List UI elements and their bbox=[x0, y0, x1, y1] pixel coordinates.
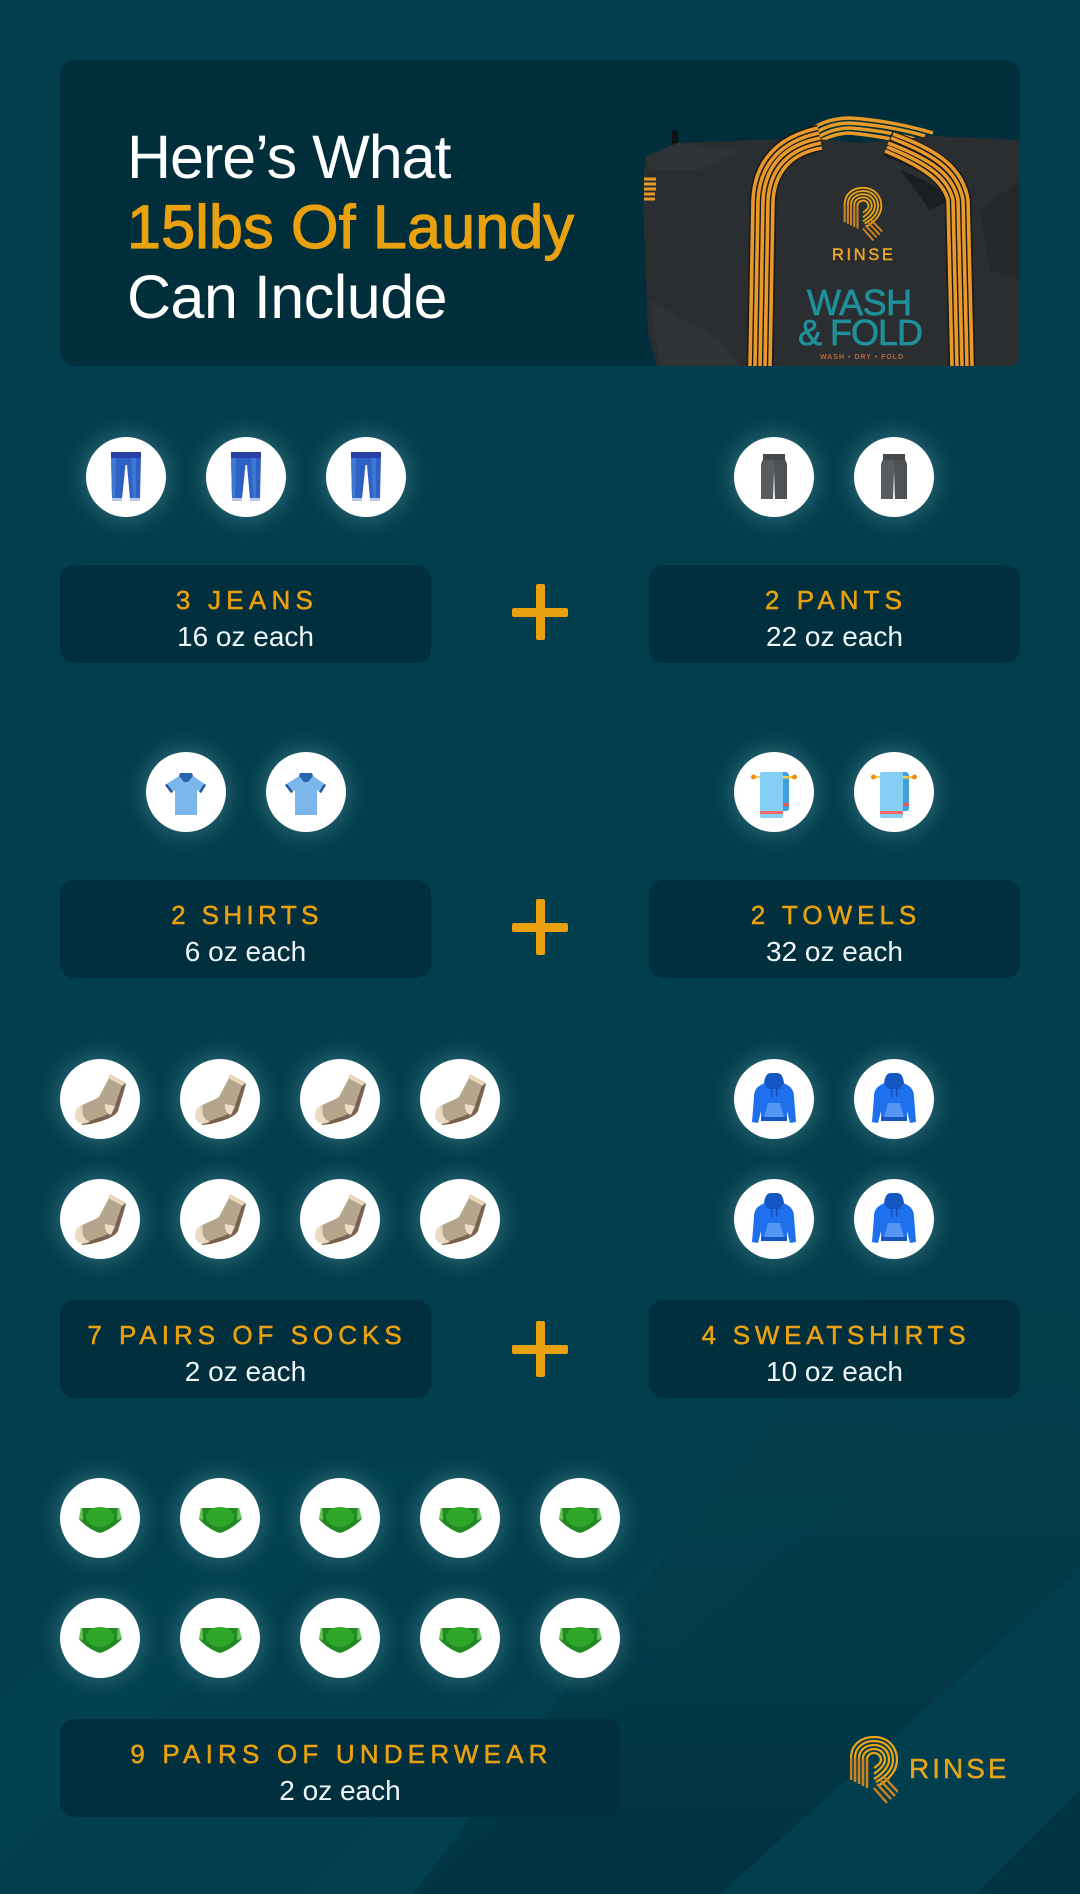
label: 7 pairs of socks: 7 PAIRS OF SOCKS bbox=[87, 1320, 407, 1350]
icon: underwear bbox=[180, 1598, 260, 1678]
icon: sweatshirt bbox=[854, 1059, 934, 1139]
icon: sock bbox=[180, 1059, 260, 1139]
icon: underwear bbox=[60, 1598, 140, 1678]
title bbox=[127, 123, 575, 331]
title: 15lbs Of Laundy bbox=[127, 193, 574, 261]
label: 9 pairs of underwear bbox=[60, 1719, 620, 1817]
label: 2 pants: 2 PANTS bbox=[765, 585, 907, 615]
icon: sock bbox=[300, 1059, 380, 1139]
icon: sock bbox=[420, 1179, 500, 1259]
label: 2 towels: 2 TOWELS bbox=[751, 900, 921, 930]
icon: underwear bbox=[540, 1598, 620, 1678]
label: 4 sweatshirts bbox=[649, 1300, 1020, 1398]
laundry bag photo illustration: & FOLD bbox=[798, 312, 922, 353]
label: 2 shirts: 6 oz each bbox=[185, 936, 306, 967]
icon: sock bbox=[180, 1179, 260, 1259]
icon: sock bbox=[300, 1179, 380, 1259]
title: Here’s What bbox=[127, 123, 450, 191]
icon: plus bbox=[512, 1321, 568, 1377]
icon: underwear bbox=[300, 1478, 380, 1558]
label: 4 sweatshirts: 10 oz each bbox=[766, 1356, 903, 1387]
laundry bag photo illustration: RINSE bbox=[832, 246, 895, 264]
icon: sock bbox=[420, 1059, 500, 1139]
label: 7 pairs of socks: 2 oz each bbox=[185, 1356, 306, 1387]
icon: pants bbox=[734, 437, 814, 517]
title: Can Include bbox=[127, 263, 447, 331]
laundry bag photo illustration: WASH • DRY • FOLD bbox=[820, 354, 904, 361]
label: 3 jeans: 3 JEANS bbox=[176, 585, 318, 615]
icon: plus bbox=[512, 584, 568, 640]
icon: sweatshirt bbox=[734, 1059, 814, 1139]
label: 2 pants: 22 oz each bbox=[766, 621, 903, 652]
logo: Rinse bbox=[850, 1736, 1010, 1804]
label: 9 pairs of underwear: 9 PAIRS OF UNDERWEAR bbox=[130, 1739, 553, 1769]
logo: Rinse: RINSE bbox=[909, 1753, 1010, 1784]
label: 3 jeans bbox=[60, 565, 431, 663]
laundry bag photo illustration bbox=[643, 116, 1020, 366]
label: 2 pants bbox=[649, 565, 1020, 663]
icon: sock bbox=[60, 1179, 140, 1259]
label: 3 jeans: 16 oz each bbox=[177, 621, 314, 652]
icon: underwear bbox=[60, 1478, 140, 1558]
icon: underwear bbox=[180, 1478, 260, 1558]
icon: pants bbox=[854, 437, 934, 517]
header panel bbox=[60, 60, 1020, 366]
icon: towel bbox=[734, 752, 814, 832]
label: 7 pairs of socks bbox=[60, 1300, 431, 1398]
label: 2 towels bbox=[649, 880, 1020, 978]
icon: towel bbox=[854, 752, 934, 832]
icon: shirt bbox=[146, 752, 226, 832]
icon: underwear bbox=[300, 1598, 380, 1678]
icon: underwear bbox=[420, 1598, 500, 1678]
label: 9 pairs of underwear: 2 oz each bbox=[279, 1775, 401, 1806]
icon: underwear bbox=[540, 1478, 620, 1558]
icon: jeans bbox=[86, 437, 166, 517]
icon: jeans bbox=[326, 437, 406, 517]
label: 2 shirts bbox=[60, 880, 431, 978]
label: 2 towels: 32 oz each bbox=[766, 936, 903, 967]
icon: sweatshirt bbox=[734, 1179, 814, 1259]
icon: sweatshirt bbox=[854, 1179, 934, 1259]
label: 2 shirts: 2 SHIRTS bbox=[171, 900, 323, 930]
icon: shirt bbox=[266, 752, 346, 832]
laundry bag photo illustration: WASH bbox=[807, 282, 912, 323]
icon: jeans bbox=[206, 437, 286, 517]
label: 4 sweatshirts: 4 SWEATSHIRTS bbox=[702, 1320, 970, 1350]
icon: underwear bbox=[420, 1478, 500, 1558]
icon: sock bbox=[60, 1059, 140, 1139]
icon: plus bbox=[512, 899, 568, 955]
